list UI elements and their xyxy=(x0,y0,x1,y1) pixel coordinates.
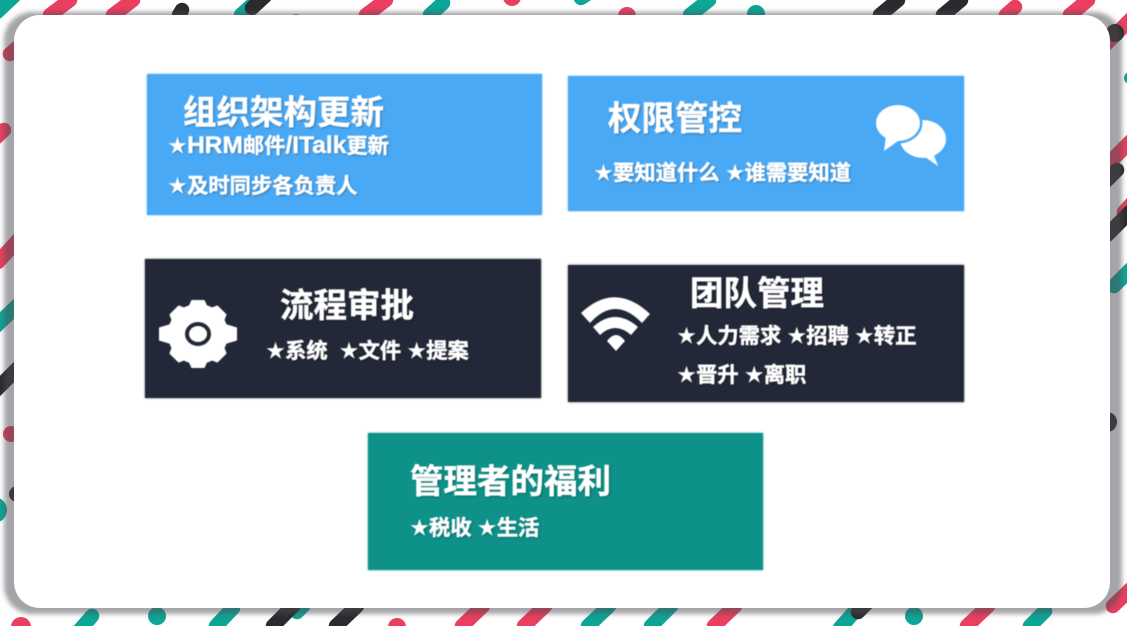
heading: 团队管理: 团队管理 xyxy=(690,276,824,313)
text: 晋升 离职: ★晋升 ★离职 xyxy=(677,363,806,387)
panel: 管理者的福利 xyxy=(368,433,763,570)
panel: 组织架构更新 xyxy=(147,74,542,215)
panel: 团队管理 xyxy=(568,265,964,402)
panel: 权限管控 xyxy=(568,76,964,211)
heading: 组织架构更新: 组织架构更新 xyxy=(183,95,384,132)
heading: 流程审批: 流程审批 xyxy=(280,288,414,325)
text: 要知道什么 谁需要知道: ★要知道什么 ★谁需要知道 xyxy=(594,161,851,185)
text: 及时同步各负责人: ★及时同步各负责人 xyxy=(168,174,357,198)
text: 人力需求 招聘 转正: ★人力需求 ★招聘 ★转正 xyxy=(677,324,916,348)
text: HRM邮件/ITalk更新: ★HRM邮件/ITalk更新 xyxy=(168,132,389,159)
icon: wifi xyxy=(580,296,650,352)
heading: 管理者的福利: 管理者的福利 xyxy=(410,464,611,501)
text: 税收 生活: ★税收 ★生活 xyxy=(410,516,539,540)
heading: 权限管控: 权限管控 xyxy=(608,101,742,138)
text: 系统 文件 提案: ★系统 ★文件 ★提案 xyxy=(266,339,469,363)
panel: 流程审批 xyxy=(145,259,541,398)
icon: chat bubbles xyxy=(875,104,947,166)
icon: gear xyxy=(158,299,238,369)
